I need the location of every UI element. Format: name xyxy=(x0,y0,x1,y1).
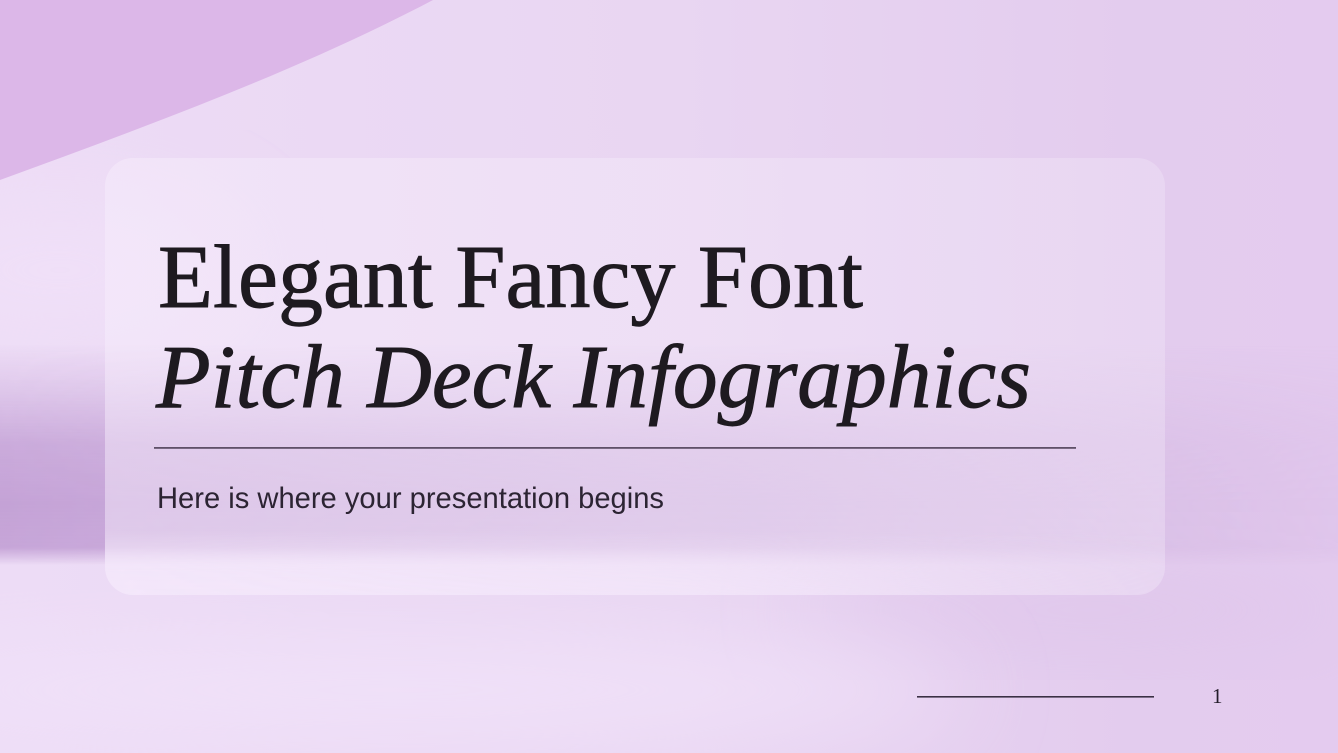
page number: 1 xyxy=(1212,684,1222,708)
divider line xyxy=(154,447,1076,449)
panel: title card xyxy=(105,158,1165,595)
title: Elegant Fancy Font xyxy=(158,228,863,327)
footer line xyxy=(917,696,1154,698)
subtitle: Here is where your presentation begins xyxy=(157,482,664,515)
swoosh shape top left xyxy=(0,0,433,180)
title xyxy=(155,228,1031,427)
title: Pitch Deck Infographics xyxy=(155,328,1031,427)
